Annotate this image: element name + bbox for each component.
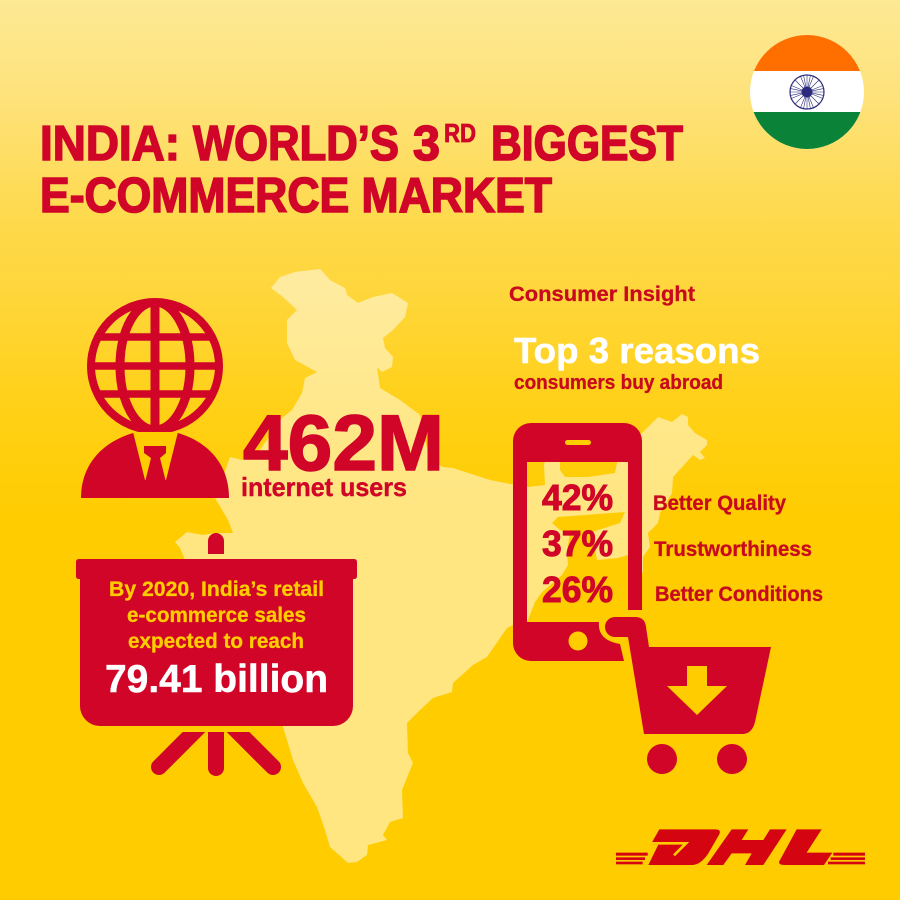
heading: consumer insight: consumers buy abroad (514, 372, 723, 394)
map of India (175, 269, 707, 863)
icon: suit body (81, 432, 229, 498)
title: WORLD’S (193, 117, 399, 171)
title (40, 117, 683, 223)
board text (109, 578, 324, 653)
title: BIGGEST (491, 117, 683, 171)
board panel (76, 559, 357, 726)
stat: internet users: internet users (241, 472, 407, 502)
title: INDIA: (40, 117, 180, 171)
icon: smartphone (513, 423, 642, 661)
DHL logo (616, 829, 865, 865)
title: RD (444, 118, 476, 148)
board figure: 79.41 billion (105, 658, 328, 701)
heading: consumer insight (509, 283, 760, 394)
percentages (542, 477, 613, 610)
title: 3 (413, 117, 440, 171)
icon: shopping cart (605, 617, 771, 774)
title: E-COMMERCE MARKET (40, 169, 552, 223)
stat: internet users: 462M (243, 398, 444, 487)
reason labels (653, 492, 823, 606)
percentages: 42% (542, 477, 613, 518)
board text: expected to reach (128, 630, 304, 653)
icon: board pin (208, 533, 224, 554)
heading: consumer insight: Consumer Insight (509, 283, 695, 306)
board legs (159, 725, 273, 768)
icon: India flag (750, 35, 864, 149)
icon: person with globe head (81, 300, 229, 498)
presentation board (76, 533, 357, 768)
reason labels: Better Conditions (655, 583, 823, 606)
board text: e-commerce sales (127, 604, 306, 627)
heading: consumer insight: Top 3 reasons (514, 330, 760, 371)
icon: globe (85, 300, 225, 432)
reason labels: Trustworthiness (654, 538, 812, 561)
percentages: 37% (542, 523, 613, 564)
board text: By 2020, India’s retail (109, 578, 324, 601)
percentages: 26% (542, 569, 613, 610)
reason labels: Better Quality (653, 492, 786, 515)
